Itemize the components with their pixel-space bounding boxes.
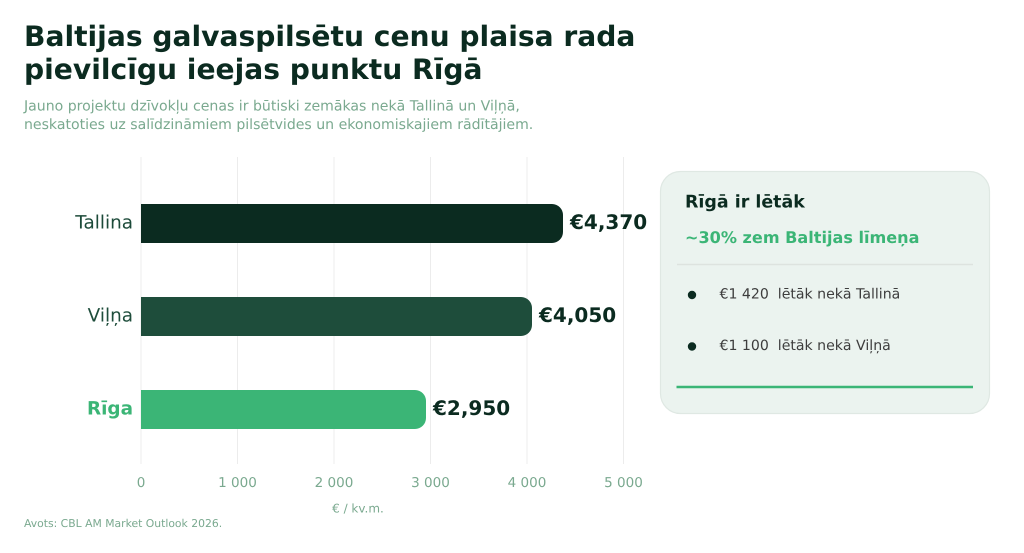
panel highlight: ~30% zem Baltijas līmeņa (685, 228, 919, 247)
x axis labels: 5 000 (604, 475, 643, 491)
item: Viļņa: €1 100 lētāk nekā Viļņā (720, 338, 891, 354)
subtitle: Jauno projektu dzīvokļu cenas ir būtiski zemākas nekā Tallinā un Viļņā, (23, 98, 520, 114)
x axis labels: 4 000 (508, 475, 546, 491)
title (24, 20, 635, 86)
bar: Viļņa: €4,050 (538, 303, 616, 327)
bar: Viļņa (88, 297, 616, 336)
subtitle (23, 98, 533, 133)
bar: Tallina: €4,370 (569, 210, 647, 234)
panel heading: Rīgā ir lētāk (685, 192, 805, 212)
title: pievilcīgu ieejas punktu Rīgā (24, 53, 482, 86)
x axis labels: 3 000 (411, 475, 450, 491)
x axis labels: 0 (137, 475, 145, 491)
bar: Rīga: €2,950 (432, 396, 510, 420)
subtitle: neskatoties uz salīdzināmiem pilsētvides un ekonomiskajiem rādītājiem. (24, 117, 533, 133)
x axis labels (137, 475, 643, 491)
source note: Avots: CBL AM Market Outlook 2026. (24, 517, 222, 530)
bar: Tallina: Tallina (74, 212, 133, 234)
bar: Rīga (87, 390, 510, 429)
title: Baltijas galvaspilsētu cenu plaisa rada (24, 20, 635, 53)
panel accent line (676, 386, 973, 388)
x axis labels: 1 000 (218, 475, 257, 491)
item: Tallina: €1 420 lētāk nekā Tallinā (720, 286, 900, 302)
bar chart (74, 157, 647, 516)
bar: Tallina (74, 204, 647, 243)
bar: Viļņa: Viļņa (88, 306, 133, 326)
bar: Rīga: Rīga (87, 398, 133, 420)
x axis labels: 2 000 (315, 475, 353, 491)
panel: callout (660, 172, 990, 414)
x axis title: € / kv.m. (332, 502, 384, 516)
